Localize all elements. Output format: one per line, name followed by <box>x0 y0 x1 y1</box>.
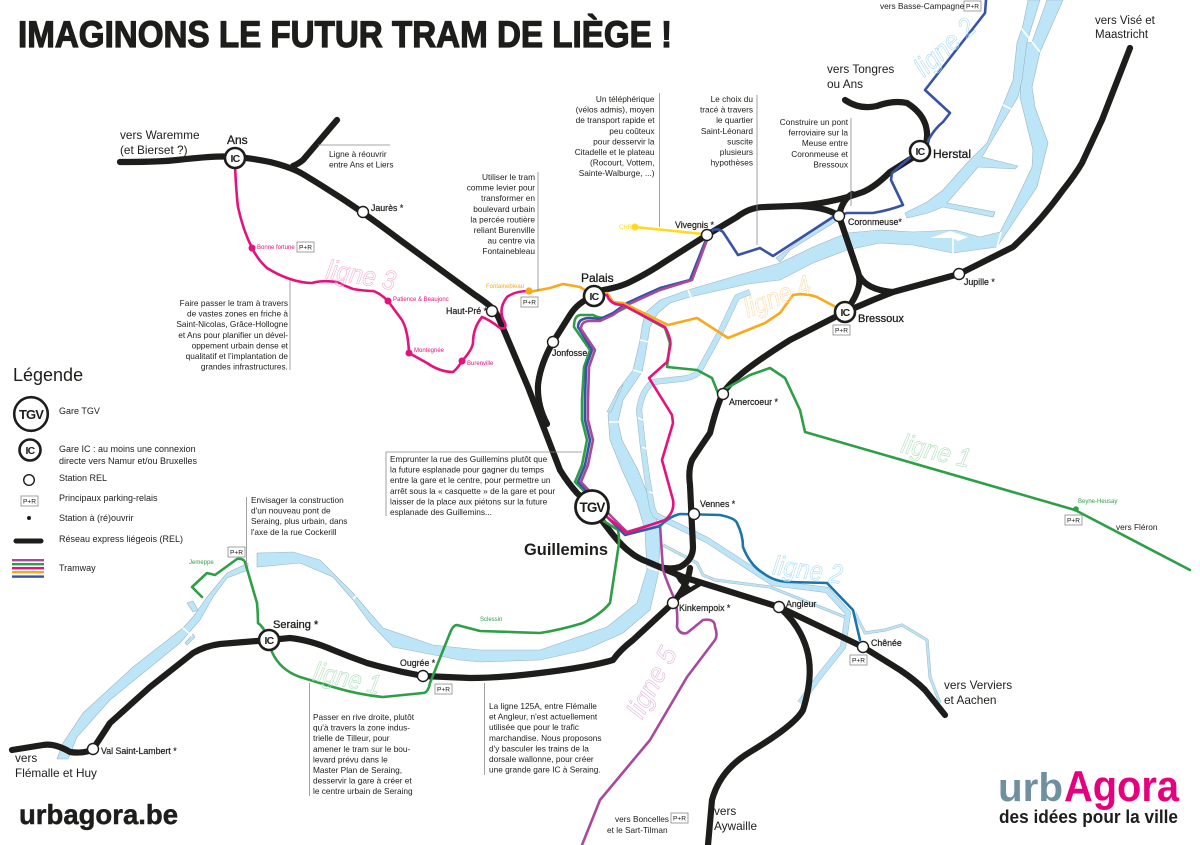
station IC: Ans: IC <box>231 153 241 165</box>
callout: Guillemins: entre la gare et le centre, pour permettre un <box>390 475 551 485</box>
legend: station REL: Station REL <box>59 473 107 483</box>
station TGV: Guillemins: TGV <box>579 500 605 515</box>
legend: station à rouvrir: Station à (ré)ouvrir <box>59 513 134 523</box>
legend: gare IC: Gare IC : au moins une connexion <box>59 444 196 454</box>
callout: pont ferroviaire: Coronmeuse et <box>791 149 849 159</box>
station names: Val Saint-Lambert * <box>101 746 177 756</box>
callout: friches: oppement urbain dense et <box>192 340 289 350</box>
station names: Haut-Pré * <box>446 306 488 316</box>
station IC: Seraing: IC <box>265 635 275 647</box>
ghost line labels: ligne 5 <box>621 641 683 723</box>
callout: levier boulevard urbain <box>467 172 535 256</box>
legend: REL: Réseau express liégeois (REL) <box>59 534 183 544</box>
station names: Jupille * <box>964 277 995 287</box>
park and ride boxes: P+R <box>437 686 450 694</box>
station names: Seraing * <box>273 619 319 631</box>
destination labels: vers Verviers <box>944 678 1012 692</box>
callout: rive droite: Passer en rive droite, plutôt <box>313 712 415 722</box>
station names: Coronmeuse* <box>848 217 902 227</box>
park and ride boxes: P+R <box>835 328 848 334</box>
ghost line labels: ligne 3 <box>324 254 398 296</box>
callout: téléphérique: Sainte-Walburge, ...) <box>579 168 655 178</box>
station names: Bressoux <box>858 313 904 325</box>
callout: téléphérique: Un téléphérique <box>596 94 655 104</box>
destination labels: ou Ans <box>827 77 863 91</box>
callout: friches: et Ans pour planifier un dével- <box>178 330 288 340</box>
callout: levier boulevard urbain: reliant Burenville <box>474 225 535 235</box>
station names: Vennes * <box>700 499 736 509</box>
callout: Guillemins <box>390 454 555 517</box>
callout: levier boulevard urbain: la percée routière <box>470 214 535 224</box>
station names: Herstal <box>933 147 971 161</box>
station names: Jonfosse <box>552 348 587 358</box>
callout: friches: grandes infrastructures. <box>201 362 288 372</box>
callout: pont ferroviaire <box>780 117 849 169</box>
ghost line labels: ligne 2 <box>908 12 982 82</box>
callout: Ans Liers <box>329 149 394 170</box>
destination labels: vers Waremme <box>120 128 200 142</box>
website: urbagora.be <box>19 799 178 830</box>
callout: Saint-Léonard <box>700 94 753 168</box>
callout: Guillemins: la future esplanade pour gagner du temps <box>390 465 544 475</box>
station names: Kinkempoix * <box>679 603 731 613</box>
tram stop names: Montegnée <box>414 348 445 354</box>
station names: Ans <box>227 133 248 147</box>
title: IMAGINONS LE FUTUR TRAM DE LIÈGE ! <box>18 14 672 55</box>
callout: Ans Liers: entre Ans et Liers <box>329 160 394 170</box>
destination labels: vers Boncelles <box>615 814 669 824</box>
ghost line labels: ligne 1 <box>311 657 384 700</box>
tram stops <box>248 224 1079 512</box>
station IC: Bressoux <box>835 302 855 322</box>
legend: gare IC <box>20 440 198 466</box>
tram stop names: Fontainebleau <box>486 284 524 290</box>
callout: pont ferroviaire: Bressoux <box>813 159 849 169</box>
legend heading: Légende <box>13 365 83 385</box>
tram line 2 <box>578 0 986 640</box>
callout: levier boulevard urbain: au centre via <box>487 236 535 246</box>
station names: Chênée <box>871 638 902 648</box>
callout: levier boulevard urbain: transformer en <box>481 193 535 203</box>
tram line 4 <box>529 284 845 338</box>
tram stop names: Jemeppe <box>189 560 214 566</box>
callout: pont de Seraing: Seraing, plus urbain, dans <box>251 516 347 526</box>
callout: ligne 125A: une grande gare IC à Seraing. <box>489 765 601 775</box>
tram stop names: Burenville <box>467 361 494 367</box>
destination labels: vers Fléron <box>1116 522 1158 532</box>
callout: friches: Saint-Nicolas, Grâce-Hollogne <box>176 319 288 329</box>
callout: téléphérique <box>575 94 655 178</box>
callout: Saint-Léonard: suscite <box>727 136 753 146</box>
rivers: Meuse, canal and Ourthe <box>57 0 1063 759</box>
callout: pont de Seraing <box>251 495 347 537</box>
destination labels: vers Basse-Campagne <box>880 1 965 11</box>
callout: Saint-Léonard: tracé à travers <box>700 105 753 115</box>
destination labels: Flémalle et Huy <box>15 766 97 780</box>
station names: Angleur <box>786 599 816 609</box>
station names: Jaurès * <box>371 203 404 213</box>
callout: pont de Seraing: Envisager la construction <box>251 495 344 505</box>
callout: pont ferroviaire: Construire un pont <box>780 117 849 127</box>
callout: levier boulevard urbain: Fontainebleau <box>482 246 535 256</box>
callout guide lines <box>246 93 851 796</box>
park and ride boxes: P+R <box>1067 518 1080 524</box>
ghost line labels: ligne 2 <box>771 550 845 590</box>
logo urbAgora: Agora <box>1064 762 1179 811</box>
station IC: Palais: IC <box>590 291 600 303</box>
legend: gare IC: directe vers Namur et/ou Bruxelles <box>59 456 198 466</box>
callout: Saint-Léonard: le quartier <box>716 115 753 125</box>
legend: gare IC: IC <box>26 445 36 457</box>
destination labels: vers <box>15 751 37 765</box>
callout: Guillemins: arrêt sous la « casquette » de la gare et pour <box>390 486 555 496</box>
callout: rive droite: levard prévu dans le <box>313 754 388 764</box>
callout: ligne 125A: La ligne 125A, entre Flémalle <box>489 701 597 711</box>
callout: pont de Seraing: l'axe de la rue Cockerill <box>251 527 337 537</box>
callout: pont ferroviaire: ferroviaire sur la <box>789 128 848 138</box>
callout: ligne 125A: et Angleur, n'est actuellement <box>489 712 598 722</box>
callout: téléphérique: (vélos admis), moyen <box>576 105 655 115</box>
callout: rive droite <box>313 712 415 796</box>
callout: téléphérique: peu coûteux <box>609 126 655 136</box>
callout: friches: de vastes zones en friche à <box>187 309 288 319</box>
callout: téléphérique: (Rocourt, Vottem, <box>590 158 654 168</box>
ghost line labels: ligne 4 <box>739 270 815 324</box>
destination labels: vers Tongres <box>827 62 894 76</box>
legend: gare TGV: Gare TGV <box>59 406 100 416</box>
park and ride boxes: P+R <box>230 550 243 556</box>
callout: rive droite: desservir la gare à créer et <box>313 776 412 786</box>
station names: Vivegnis * <box>675 220 715 230</box>
callout: ligne 125A: d'y basculer les trains de la <box>489 743 589 753</box>
tram purple shared section <box>581 240 707 532</box>
legend: parking-relais: P+R <box>23 498 36 506</box>
tram stop names: Bonne fortune <box>257 245 295 251</box>
yellow cable car CHR <box>635 227 703 234</box>
legend: gare TGV: TGV <box>19 407 44 422</box>
station IC: Herstal: IC <box>916 146 926 158</box>
callout: levier boulevard urbain: Utiliser le tram <box>482 172 535 182</box>
tram line 5 <box>582 525 716 845</box>
park and ride boxes: P+R <box>299 244 312 252</box>
callout: Saint-Léonard: Saint-Léonard <box>701 126 753 136</box>
ghost line labels: ligne 1 <box>899 429 974 474</box>
tram line 3 <box>235 165 673 533</box>
callout: rive droite: trielle de Tilleur, pour <box>313 733 390 743</box>
callout: Saint-Léonard: plusieurs <box>720 147 753 157</box>
legend <box>12 365 198 578</box>
logo urbAgora: des idées pour la ville <box>999 807 1178 827</box>
callout: Guillemins: Emprunter la rue des Guillemins plutôt que <box>390 454 548 464</box>
logo urbAgora: urb <box>998 766 1063 810</box>
station names: Palais <box>581 271 614 285</box>
destination labels: Maastricht <box>1095 29 1149 41</box>
destination labels: (et Bierset ?) <box>120 143 188 157</box>
legend: parking-relais: Principaux parking-relais <box>59 493 158 503</box>
destination labels: et Aachen <box>944 693 996 707</box>
callout: téléphérique: de transport rapide et <box>576 115 655 125</box>
callout: levier boulevard urbain: boulevard urbain <box>473 204 535 214</box>
callout: rive droite: le centre urbain de Seraing <box>313 786 413 796</box>
callout: ligne 125A <box>489 701 602 775</box>
station names: Ougrée * <box>400 658 436 668</box>
station IC: Bressoux: IC <box>841 307 851 319</box>
destination labels: vers Visé et <box>1095 15 1156 27</box>
legend: parking-relais <box>21 493 158 506</box>
station IC: Palais <box>584 286 604 306</box>
callout: friches <box>176 298 289 372</box>
callout: Guillemins: laisser de la place aux piétons sur la future <box>390 496 548 506</box>
legend: station REL <box>24 473 107 485</box>
callout: rive droite: qu'à travers la zone indus- <box>313 723 410 733</box>
legend: station à rouvrir <box>27 513 134 523</box>
park and ride boxes: P+R <box>852 658 865 664</box>
park and ride boxes <box>228 1 1082 823</box>
legend: gare TGV <box>14 397 100 431</box>
ghost line labels <box>311 12 982 723</box>
tram stop names: Patience & Beaujonc <box>393 297 449 303</box>
callout: pont de Seraing: d'un nouveau pont de <box>251 506 331 516</box>
callout: Ans Liers: Ligne à réouvrir <box>329 149 387 159</box>
park and ride boxes: P+R <box>966 4 979 10</box>
station IC: Seraing <box>259 630 279 650</box>
callout: pont ferroviaire: Meuse entre <box>802 138 848 148</box>
callout: Guillemins: esplanade des Guillemins... <box>390 507 492 517</box>
destination labels: vers <box>714 804 736 818</box>
callout: téléphérique: pour desservir la <box>593 136 655 146</box>
station names: Amercoeur * <box>729 397 778 407</box>
destination labels: Aywaille <box>714 819 757 833</box>
park and ride boxes: P+R <box>673 816 686 822</box>
station IC: Ans <box>225 148 245 168</box>
tram line 1 <box>192 307 1190 697</box>
legend: tramway <box>12 559 96 578</box>
destination labels: et le Sart-Tilman <box>607 825 668 835</box>
callout: ligne 125A: utilisée que pour le trafic <box>489 722 579 732</box>
callout: rive droite: amener le tram sur le bou- <box>313 744 411 754</box>
tram stop names: Sclessin <box>480 617 502 623</box>
callout: levier boulevard urbain: comme levier pour <box>467 183 535 193</box>
callout: Saint-Léonard: Le choix du <box>711 94 753 104</box>
callout: Saint-Léonard: hypothèses <box>711 158 753 168</box>
station names <box>101 133 995 756</box>
park and ride boxes: P+R <box>523 300 536 306</box>
callout: téléphérique: Citadelle et le plateau <box>575 147 655 157</box>
tram stop names: Beyne-Heusay <box>1078 499 1117 505</box>
station IC: Herstal <box>910 141 930 161</box>
callout: ligne 125A: dorsale wallonne, pour créer <box>489 754 594 764</box>
tram stop names <box>189 225 1117 623</box>
station TGV: Guillemins <box>576 490 608 524</box>
legend: tramway: Tramway <box>59 563 96 573</box>
logo urbAgora <box>998 762 1179 827</box>
callout: rive droite: Master Plan de Seraing, <box>313 765 402 775</box>
tram stop names: CHR <box>619 225 633 231</box>
stations REL <box>88 206 964 754</box>
station names: Guillemins <box>524 540 608 559</box>
callout: friches: Faire passer le tram à travers <box>180 298 288 308</box>
callout: ligne 125A: marchandise. Nous proposons <box>489 733 602 743</box>
callout: friches: qualitatif et l’implantation de <box>186 351 288 361</box>
